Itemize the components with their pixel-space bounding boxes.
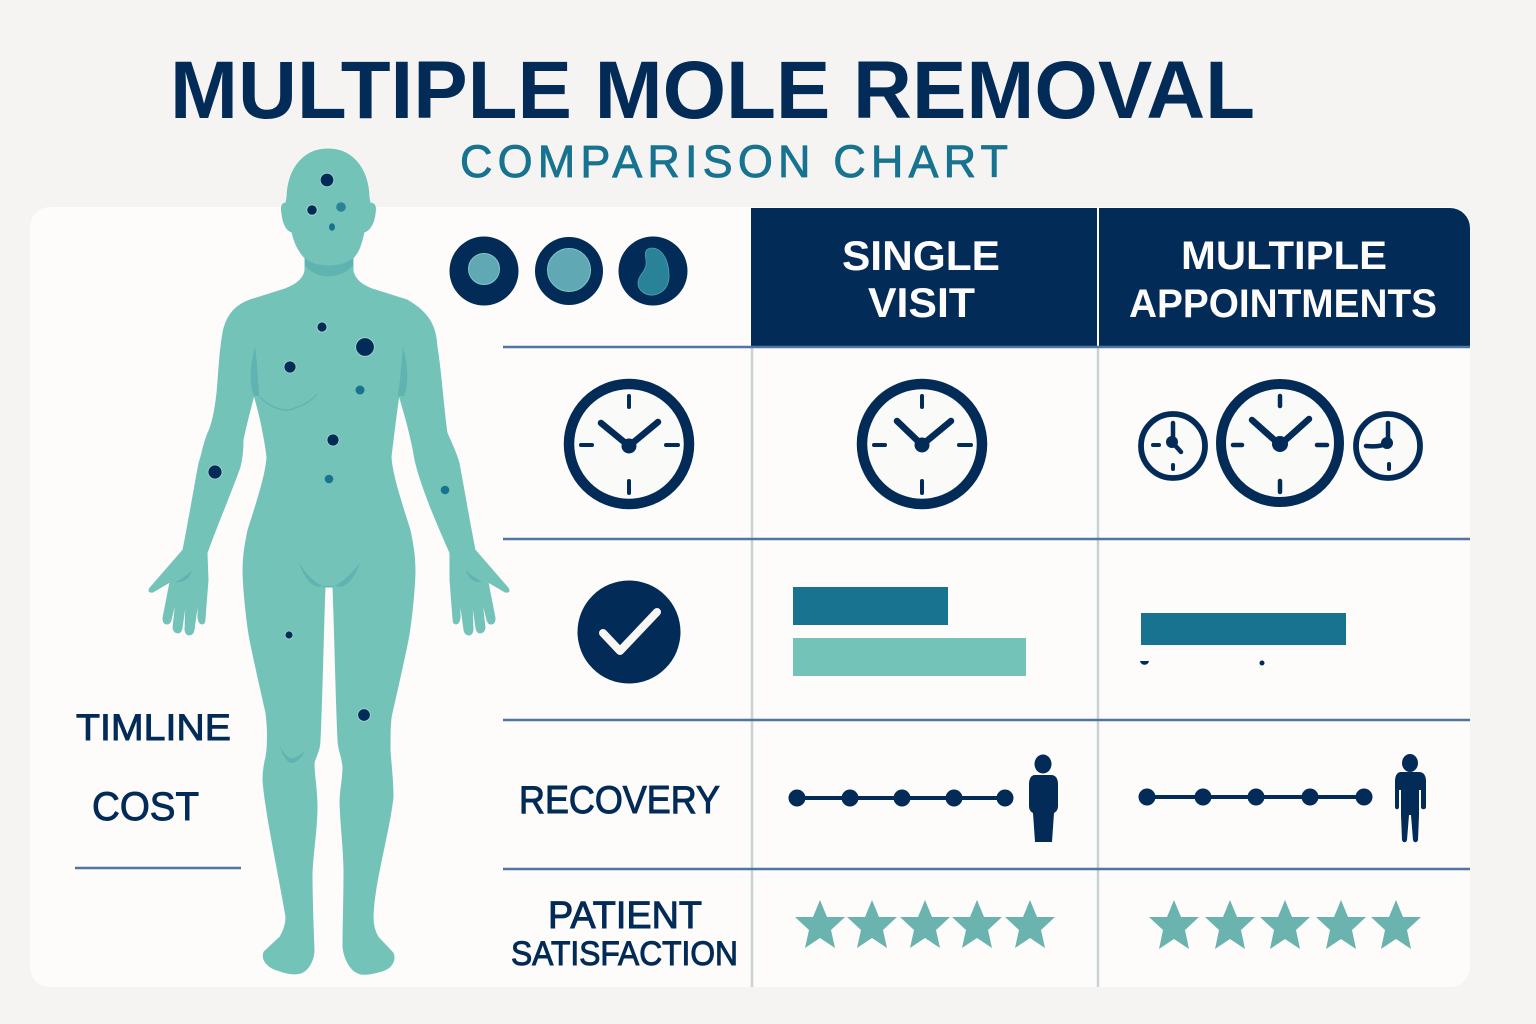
multiple appointments cost bar [1140, 613, 1346, 666]
subtitle: COMPARISON CHART [460, 136, 1008, 187]
multiple appointments star rating [1149, 900, 1421, 949]
header: multiple appointments: APPOINTMENTS [1129, 282, 1437, 326]
single visit cost bars [793, 587, 1026, 676]
body shading [176, 258, 482, 763]
single visit star rating [795, 900, 1055, 948]
label: timline: TIMLINE [76, 707, 231, 748]
multiple appointments clocks [1141, 384, 1420, 502]
label: patient satisfaction [511, 895, 738, 973]
icon: round small mole [450, 236, 518, 306]
single visit clock [862, 384, 982, 504]
label: cost: COST [92, 785, 199, 829]
header: single visit: VISIT [868, 279, 975, 326]
row icon: clock [569, 384, 689, 504]
label: recovery: RECOVERY [519, 779, 720, 822]
header: single visit: SINGLE [842, 232, 1000, 279]
moles [208, 173, 374, 721]
header: single visit [751, 208, 1097, 346]
label: patient satisfaction: SATISFACTION [511, 935, 738, 973]
label: patient satisfaction: PATIENT [548, 895, 702, 937]
body silhouette [149, 149, 509, 974]
header: multiple appointments: MULTIPLE [1181, 234, 1387, 278]
icon: person [1395, 754, 1426, 842]
multiple appointments recovery timeline [1138, 754, 1426, 842]
panel: chart card [30, 207, 1470, 987]
title: MULTIPLE MOLE REMOVAL [170, 45, 1255, 136]
illustration: human body with moles [149, 149, 509, 974]
single visit recovery timeline [788, 754, 1058, 842]
row icon: check mark [578, 580, 680, 684]
icon: round large mole [535, 237, 603, 305]
header: multiple appointments [1099, 208, 1470, 346]
icon: irregular mole [618, 236, 688, 306]
icon: person [1029, 754, 1058, 842]
mole type icons [450, 236, 688, 306]
